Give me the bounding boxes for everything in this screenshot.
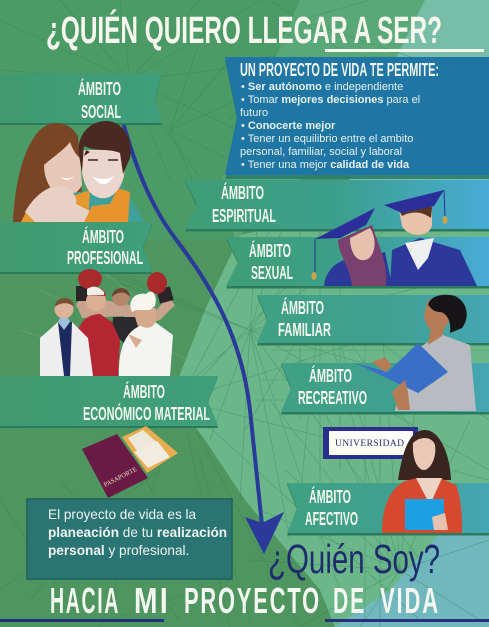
benefits list: • Tomar mejores decisiones para el xyxy=(241,94,420,106)
ribbon: sexual xyxy=(226,237,489,288)
ribbon: recreativo: ÁMBITO xyxy=(309,365,352,386)
benefits list: • Ser autónomo e independiente xyxy=(241,81,403,93)
ribbon: sexual: SEXUAL xyxy=(251,263,293,283)
title underline xyxy=(325,49,484,52)
ribbon: familiar xyxy=(257,295,489,346)
footer title: DE xyxy=(333,580,366,621)
illustration: man with book xyxy=(355,295,476,411)
footer title: HACIA xyxy=(50,580,120,621)
illustration: passport and tickets xyxy=(82,426,178,498)
ribbon: sexual: ÁMBITO xyxy=(249,240,291,261)
ribbon: profesional xyxy=(0,223,152,274)
footer title xyxy=(50,580,440,621)
benefits list: • Tener un equilibrio entre el ambito xyxy=(241,133,413,145)
ribbon: profesional: ÁMBITO xyxy=(82,226,124,247)
illustration: woman with folder xyxy=(382,430,462,533)
panel: proyecto de vida benefits xyxy=(225,57,489,179)
passport label: PASAPORTE xyxy=(103,466,138,489)
footer title: MI xyxy=(134,580,170,621)
ribbon: familiar: FAMILIAR xyxy=(278,320,331,340)
ribbon: espiritual: ÁMBITO xyxy=(221,182,264,203)
benefits list: • Conocerte mejor xyxy=(241,120,336,132)
ribbon: afectivo: ÁMBITO xyxy=(309,486,351,507)
illustration: professionals xyxy=(40,269,175,376)
ribbon: economico material: ÁMBITO xyxy=(123,381,165,402)
benefits list: futuro xyxy=(240,107,268,119)
ribbon: familiar: ÁMBITO xyxy=(281,297,324,318)
footer rule right xyxy=(325,619,489,622)
benefits list: • Tener una mejor calidad de vida xyxy=(241,159,410,171)
ribbon: profesional: PROFESIONAL xyxy=(67,248,143,268)
callout: definition: El proyecto de vida es la xyxy=(48,507,197,522)
callout: definition xyxy=(27,499,232,579)
footer title: PROYECTO xyxy=(184,580,321,621)
illustration: couple xyxy=(13,121,145,222)
ribbon: economico material: ECONÓMICO MATERIAL xyxy=(83,403,210,424)
ribbon: social: ÁMBITO xyxy=(78,78,121,99)
illustration: graduates xyxy=(312,190,477,286)
sign: universidad: UNIVERSIDAD xyxy=(335,439,404,449)
footer rule left xyxy=(0,619,164,622)
callout: definition: personal y profesional. xyxy=(48,543,189,558)
ribbon: social xyxy=(0,74,162,125)
benefits list xyxy=(240,81,420,171)
ribbon: social: SOCIAL xyxy=(81,102,121,122)
benefits list: personal, familiar, social y laboral xyxy=(240,146,402,158)
ribbon: recreativo: RECREATIVO xyxy=(298,388,367,408)
sign: universidad xyxy=(323,427,418,459)
footer title: VIDA xyxy=(380,580,440,621)
ribbon: afectivo: AFECTIVO xyxy=(305,509,358,529)
ribbon: espiritual: ESPIRITUAL xyxy=(212,206,276,226)
callout: definition: planeación de tu realización xyxy=(48,525,227,540)
ribbon: espiritual xyxy=(185,180,489,232)
ribbon: recreativo xyxy=(281,363,489,414)
arrow xyxy=(123,122,284,554)
ribbon: afectivo xyxy=(287,483,489,536)
ribbon: economico material xyxy=(0,376,218,428)
